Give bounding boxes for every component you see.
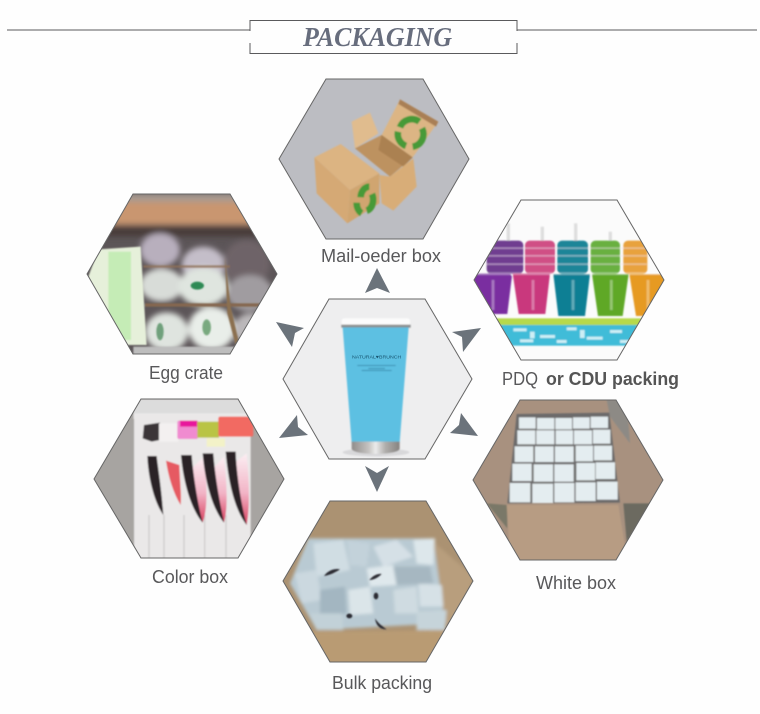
panel: central product tumbler	[283, 299, 473, 459]
heading: PACKAGING	[302, 22, 452, 52]
hexagon outline	[474, 200, 664, 360]
arrow: to color box	[279, 415, 308, 438]
title banner	[7, 20, 757, 54]
label: or CDU packing	[546, 368, 679, 389]
panel: bulk packing	[283, 501, 477, 693]
label: PDQ	[502, 369, 538, 389]
label: Color box	[152, 567, 228, 587]
hexagon outline	[94, 399, 284, 558]
arrow: to white box	[450, 413, 478, 436]
label: Bulk packing	[332, 673, 432, 693]
arrow: down to bulk packing	[365, 466, 389, 492]
arrow: to PDQ	[452, 328, 481, 352]
arrow: to egg crate	[276, 322, 304, 347]
cup brand text: NATURAL♥BRUNCH	[352, 355, 402, 361]
hexagon outline	[473, 400, 663, 560]
hexagon outline	[283, 501, 473, 662]
arrow: up to mail-order box	[365, 268, 390, 293]
hexagon outline	[87, 194, 277, 354]
label: White box	[536, 573, 616, 593]
hexagon outline	[279, 79, 469, 239]
panel: mail-order box	[279, 79, 469, 266]
panel: egg crate	[80, 193, 290, 383]
label: Egg crate	[149, 363, 223, 383]
panel: white box	[473, 400, 663, 593]
panel: color box	[94, 399, 284, 587]
hexagon outline	[283, 299, 472, 459]
panel: PDQ or CDU packing	[473, 200, 679, 389]
label: Mail-oeder box	[321, 246, 441, 266]
